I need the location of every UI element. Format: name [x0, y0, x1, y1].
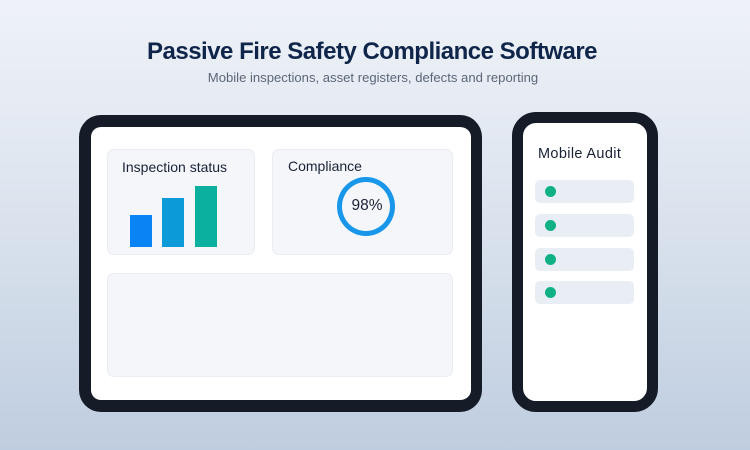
title: Passive Fire Safety Compliance Software	[147, 38, 597, 65]
status dot 4	[545, 287, 556, 298]
status dot 2	[545, 220, 556, 231]
bar: second	[162, 198, 184, 247]
panel: compliance	[272, 149, 453, 255]
list row 4	[535, 281, 634, 304]
phone heading: Mobile Audit	[538, 146, 621, 162]
heading: compliance: Compliance	[288, 158, 362, 174]
list row 1	[535, 180, 634, 203]
tablet device	[79, 115, 482, 412]
compliance ring	[337, 177, 395, 236]
status dot 1	[545, 186, 556, 197]
list row 3	[535, 248, 634, 271]
heading: inspection status: Inspection status	[122, 159, 227, 175]
status dot 3	[545, 254, 556, 265]
subtitle: Mobile inspections, asset registers, defects and reporting	[208, 70, 538, 85]
panel: empty table area	[107, 273, 453, 377]
compliance value: 98%	[351, 197, 383, 214]
bar: first	[130, 215, 152, 247]
panel: inspection status	[107, 149, 255, 255]
phone device	[512, 112, 658, 412]
bar: third	[195, 186, 217, 247]
list row 2	[535, 214, 634, 237]
